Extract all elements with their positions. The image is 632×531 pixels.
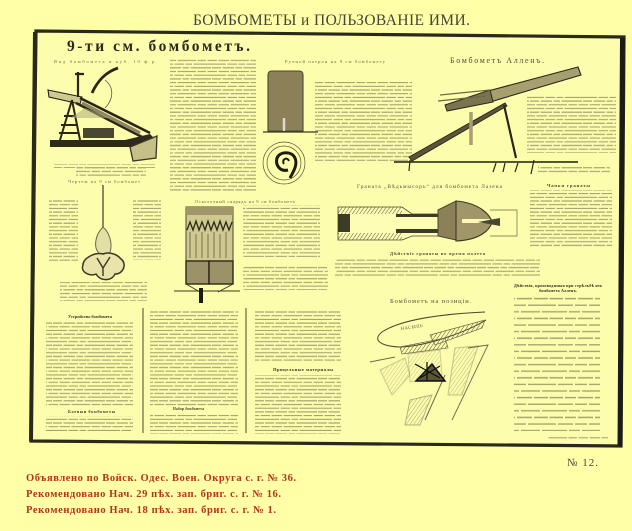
charge legend lower <box>243 265 328 290</box>
cartridge legend <box>315 80 412 161</box>
red endorsements: Рекомендовано Нач. 29 пѣх. зап. бриг. с. г. № 16. <box>26 489 281 500</box>
caption: grenade in flight: Дѣйствіе гранаты во время полета <box>390 251 486 256</box>
illustration: spiral fuse <box>263 142 305 184</box>
column 2 text <box>150 310 238 407</box>
heading: firing actions: Дѣйствія, производимыя при стрѣльбѣ изъ <box>514 283 603 288</box>
illustration: position map <box>370 312 488 425</box>
column 1 second heading: Боевыя бомбометы <box>68 409 116 414</box>
illustration: cartridge section <box>263 71 318 132</box>
Allen mortar weights <box>538 167 610 174</box>
paragraph: grenade action <box>335 259 540 278</box>
plate number: № 12. <box>567 457 598 469</box>
heading: fuse: Ручной патрон на 9 см бомбомету <box>285 59 386 64</box>
illustration: grenade section <box>338 201 517 241</box>
heading: mortar in position: Бомбометъ на позиціи. <box>390 298 472 305</box>
column 1 text <box>46 321 133 406</box>
column 2 heading: Набор бомбомета <box>173 407 204 411</box>
text: bomb left <box>49 199 78 261</box>
Allen mortar legend <box>527 95 616 153</box>
illustration: charge cross-section <box>174 207 240 303</box>
illustration: 9 cm mortar <box>48 68 157 161</box>
column 1 lower text <box>46 416 133 433</box>
heading: firing actions <box>514 283 603 293</box>
column divider 1 <box>142 308 144 433</box>
title: БОМБОМЕТЫ и ПОЛЬЗОВАНІЕ ИМИ. <box>193 12 470 29</box>
column 3 lower text <box>255 375 341 434</box>
subheading: mortar view: Вид бомбомета в куб. 10 ф.р. <box>54 59 157 64</box>
column 3 text <box>255 310 341 362</box>
heading: 9 cm mortar: 9-ти см. бомбометъ. <box>67 38 250 55</box>
column 1 heading: Устройство бомбомета <box>68 314 113 319</box>
signature <box>548 437 608 440</box>
numbered parts text <box>170 58 256 193</box>
charge legend <box>243 205 320 257</box>
red endorsements: Рекомендовано Нач. 18 пѣх. зап. бриг. с. г. № 1. <box>26 505 276 516</box>
label: mound: НАСЫПЬ <box>400 323 424 331</box>
text: bomb right <box>133 199 161 260</box>
illustration: Allen mortar <box>394 67 581 174</box>
caption under bomb <box>60 282 147 301</box>
heading: grenade parts: Чапки гранаты <box>547 183 590 188</box>
firing actions text <box>514 297 600 431</box>
column 3 heading: Прицельные материалы <box>273 367 333 372</box>
grenade legend <box>530 190 612 248</box>
caption under mortar: Чертеж на 9 см бомбомет <box>68 179 140 184</box>
red endorsements: Объявлено по Войск. Одес. Воен. Округа с. г. № 36. <box>26 473 296 484</box>
heading: grenade: Граната „Вѣдьмысоръ“ для бомбомета Лазена <box>357 183 503 190</box>
column 2 lower text <box>150 414 238 434</box>
column divider 2 <box>245 308 247 433</box>
caption under mortar <box>54 164 155 184</box>
heading: Allen mortar: Бомбометъ Алленъ. <box>450 56 545 65</box>
red endorsements <box>26 473 296 516</box>
heading: fragmentation charge: Осколочный снарядъ на 9 см бомбометъ <box>195 199 296 204</box>
heading: firing actions: бомбомета Алленъ. <box>539 288 577 293</box>
poster frame <box>31 31 624 446</box>
illustration: bomb on rod <box>82 185 124 280</box>
